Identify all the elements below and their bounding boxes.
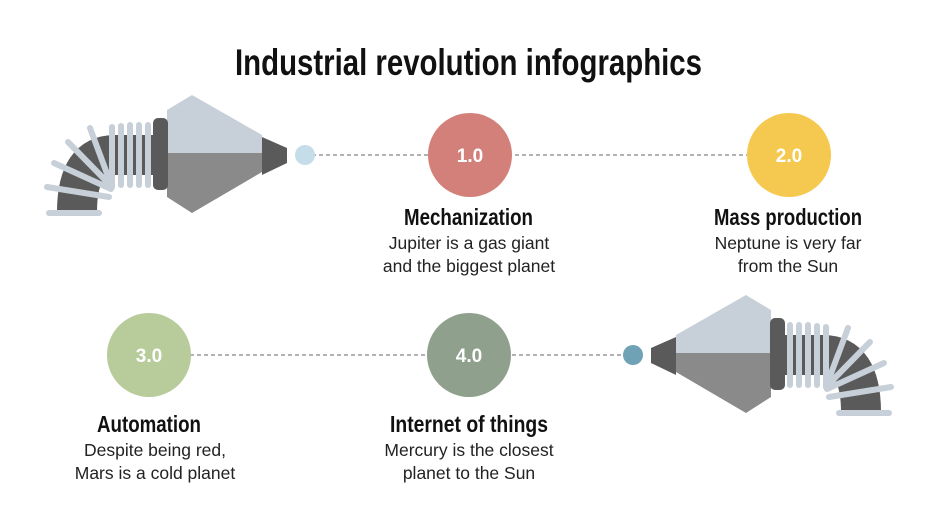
step 2.0 xyxy=(714,113,862,276)
step 1.0 xyxy=(383,113,555,276)
step 3.0: Despite being red, xyxy=(84,440,226,460)
step 4.0: planet to the Sun xyxy=(403,463,535,483)
step 4.0: Internet of things xyxy=(390,411,548,437)
step 1.0: and the biggest planet xyxy=(383,256,555,276)
step 2.0: Neptune is very far xyxy=(715,233,862,253)
step 2.0: from the Sun xyxy=(738,256,838,276)
step 1.0: 1.0 xyxy=(457,146,483,167)
step 1.0: Mechanization xyxy=(404,204,533,230)
step 3.0: Automation xyxy=(97,411,201,437)
title: Industrial revolution infographics xyxy=(235,42,702,83)
step 3.0 xyxy=(75,313,235,483)
step 3.0: 3.0 xyxy=(136,346,162,367)
step 3.0: Mars is a cold planet xyxy=(75,463,235,483)
connector line bottom xyxy=(190,354,625,356)
step 4.0 xyxy=(384,313,554,483)
connector line top xyxy=(312,154,750,156)
icon: robotic arm left xyxy=(47,95,315,213)
step 4.0: Mercury is the closest xyxy=(384,440,554,460)
icon: robotic arm right xyxy=(623,295,891,413)
step 1.0: Jupiter is a gas giant xyxy=(389,233,549,253)
step 2.0: 2.0 xyxy=(776,146,802,167)
step 2.0: Mass production xyxy=(714,204,862,230)
step 4.0: 4.0 xyxy=(456,346,482,367)
